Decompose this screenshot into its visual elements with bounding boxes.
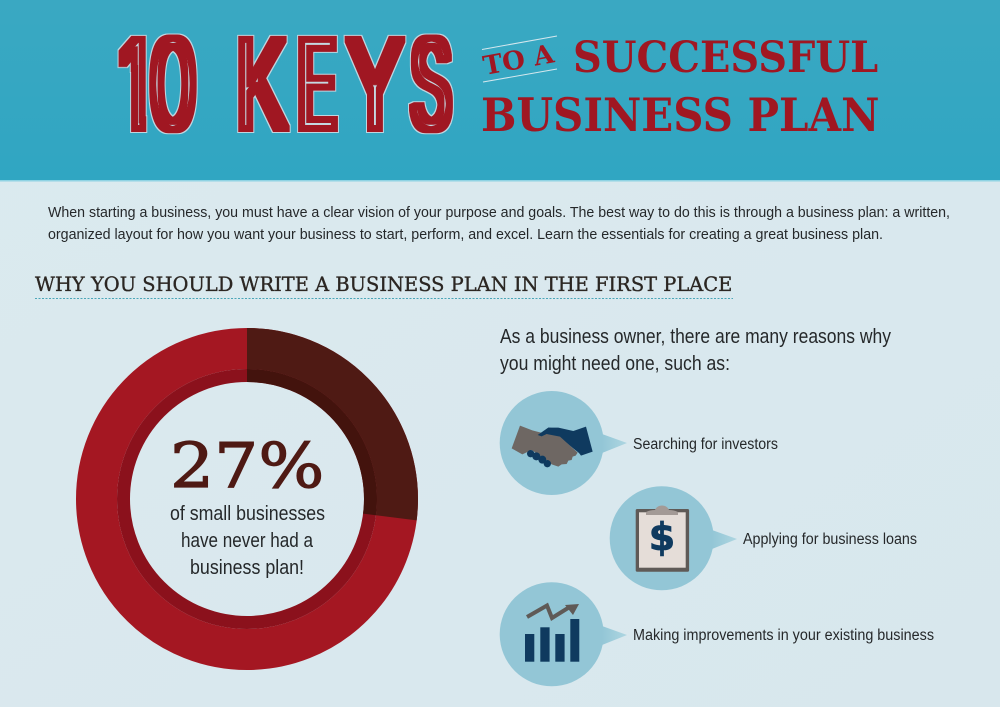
intro paragraph: organized layout for how you want your business to start, perform, and excel. Learn the essentials for creating a great business plan. [48,226,883,243]
title: to a: TO A [481,39,557,82]
title: 10 KEYS [118,34,454,134]
title: successful: SUCCESSFUL [573,32,878,82]
title: 10 KEYS: Y [347,12,403,157]
intro paragraph: When starting a business, you must have a clear vision of your purpose and goals. The best way to do this is through a business plan: a written, [48,204,950,221]
label: applying for business loans: Applying for business loans [743,531,917,548]
donut caption [170,503,325,579]
icon: handshake bubble [500,391,627,495]
reasons intro text [500,325,892,375]
reasons intro text: As a business owner, there are many reasons why [500,325,892,348]
title: business plan: BUSINESS PLAN [481,89,879,142]
section heading: WHY YOU SHOULD WRITE A BUSINESS PLAN IN THE FIRST PLACE [35,273,732,296]
reason 1: investors [500,391,778,495]
label: making improvements: Making improvements in your existing business [633,627,934,644]
title: 10 KEYS: E [299,12,335,158]
reasons intro text: you might need one, such as: [500,352,730,375]
donut statistic: 27%: 27% [170,430,324,502]
title: 10 KEYS: 0 [150,12,196,158]
title: 10 KEYS: 1 [115,10,159,157]
title: 10 KEYS: S [411,10,451,157]
donut chart: 27% [96,348,398,650]
reason 2: loans [610,486,917,590]
icon: clipboard bubble [610,486,737,590]
intro paragraph [48,204,950,243]
donut caption: of small businesses [170,503,325,525]
reason 3: improvements [500,582,934,686]
label: searching for investors: Searching for investors [633,436,778,453]
title: 10 KEYS: K [236,10,287,157]
donut caption: have never had a [181,530,314,552]
icon: bar chart bubble [500,582,627,686]
header banner [0,0,1000,180]
donut caption: business plan! [190,557,304,579]
icon: clipboard bubble: $ [649,515,675,559]
